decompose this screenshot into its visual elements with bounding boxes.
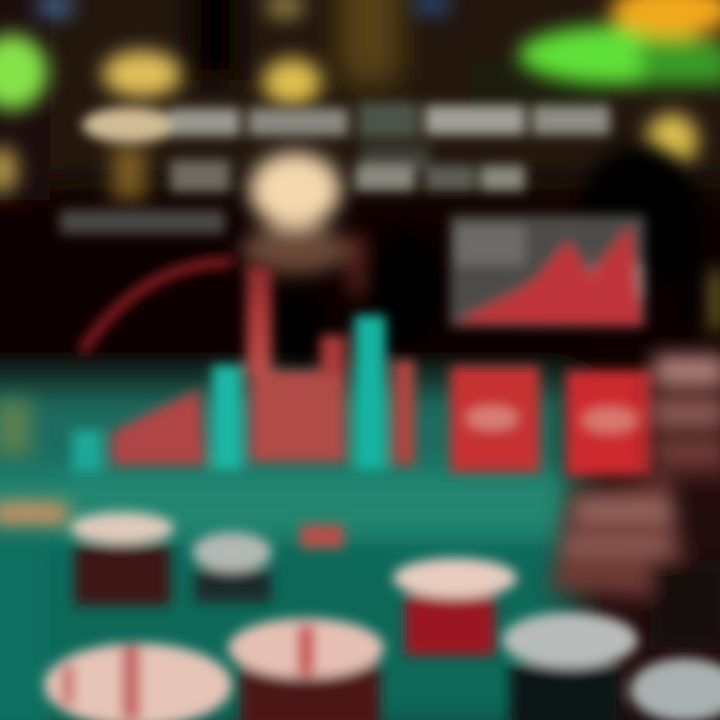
chip stack: upper left: [70, 512, 174, 605]
title: blurred heading lines: [60, 102, 610, 234]
arc line chart: [82, 262, 232, 352]
table felt band: [60, 478, 560, 533]
stat card: right: [566, 370, 656, 476]
chip stack: right red: [393, 558, 517, 655]
chip stack: foreground left: [44, 643, 232, 720]
golden lamps: [0, 50, 720, 330]
central glowing figure: [240, 152, 364, 295]
chart panel: area chart: [450, 215, 645, 327]
lower left felt: [0, 535, 50, 720]
hand with stacked chips, right: [550, 350, 720, 650]
small red label on table: [300, 524, 344, 548]
chip stack: centre: [192, 532, 272, 602]
chip stack: foreground middle: [228, 618, 384, 720]
bar chart: [72, 265, 415, 472]
chip stack: foreground right grey: [502, 612, 720, 720]
neon lights: green and orange signs: [0, 0, 720, 110]
stat card: left: [450, 366, 540, 472]
left edge legend: [0, 400, 70, 524]
dark blobs behind the charts: [276, 145, 700, 363]
